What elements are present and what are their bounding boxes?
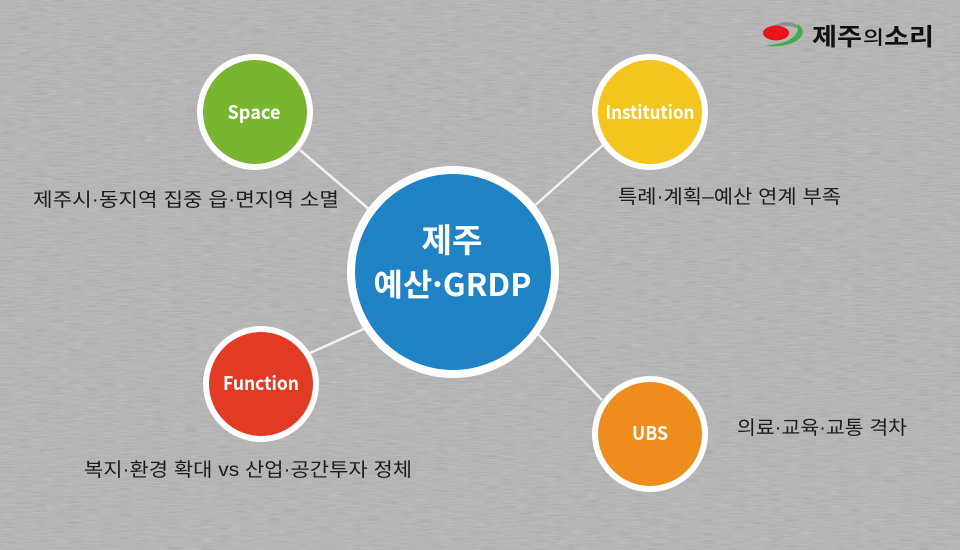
label: Institution description: 특례·계획–예산 연계 부족 xyxy=(618,186,841,208)
node: UBS: UBS xyxy=(632,419,668,446)
label: Space description: 제주시·동지역 집중 읍·면지역 소멸 xyxy=(33,189,339,211)
center circle: 제주 예산·GRDP xyxy=(347,166,559,378)
logo: 제주의소리: 의 xyxy=(863,27,884,49)
label: Function description: 복지·환경 확대 vs 산업·공간투자 정체 xyxy=(84,459,412,481)
node: Space xyxy=(197,54,313,170)
logo: 제주의소리: 소리 xyxy=(884,24,934,51)
node: Institution xyxy=(592,54,708,170)
node: Function xyxy=(203,326,319,442)
node: Function: Function xyxy=(223,369,299,396)
label: UBS description: 의료·교육·교통 격차 xyxy=(737,417,907,439)
logo mark: swoosh xyxy=(763,22,803,46)
center circle: 제주 예산·GRDP: 제주 xyxy=(422,214,482,262)
logo: 제주의소리 xyxy=(763,22,934,51)
connector lines xyxy=(300,145,603,400)
node: UBS xyxy=(592,376,708,492)
center circle: 제주 예산·GRDP: 예산·GRDP xyxy=(374,260,532,305)
node: Institution: Institution xyxy=(606,98,694,125)
node: Space: Space xyxy=(228,98,280,125)
logo: 제주의소리: 제주 xyxy=(812,24,862,51)
